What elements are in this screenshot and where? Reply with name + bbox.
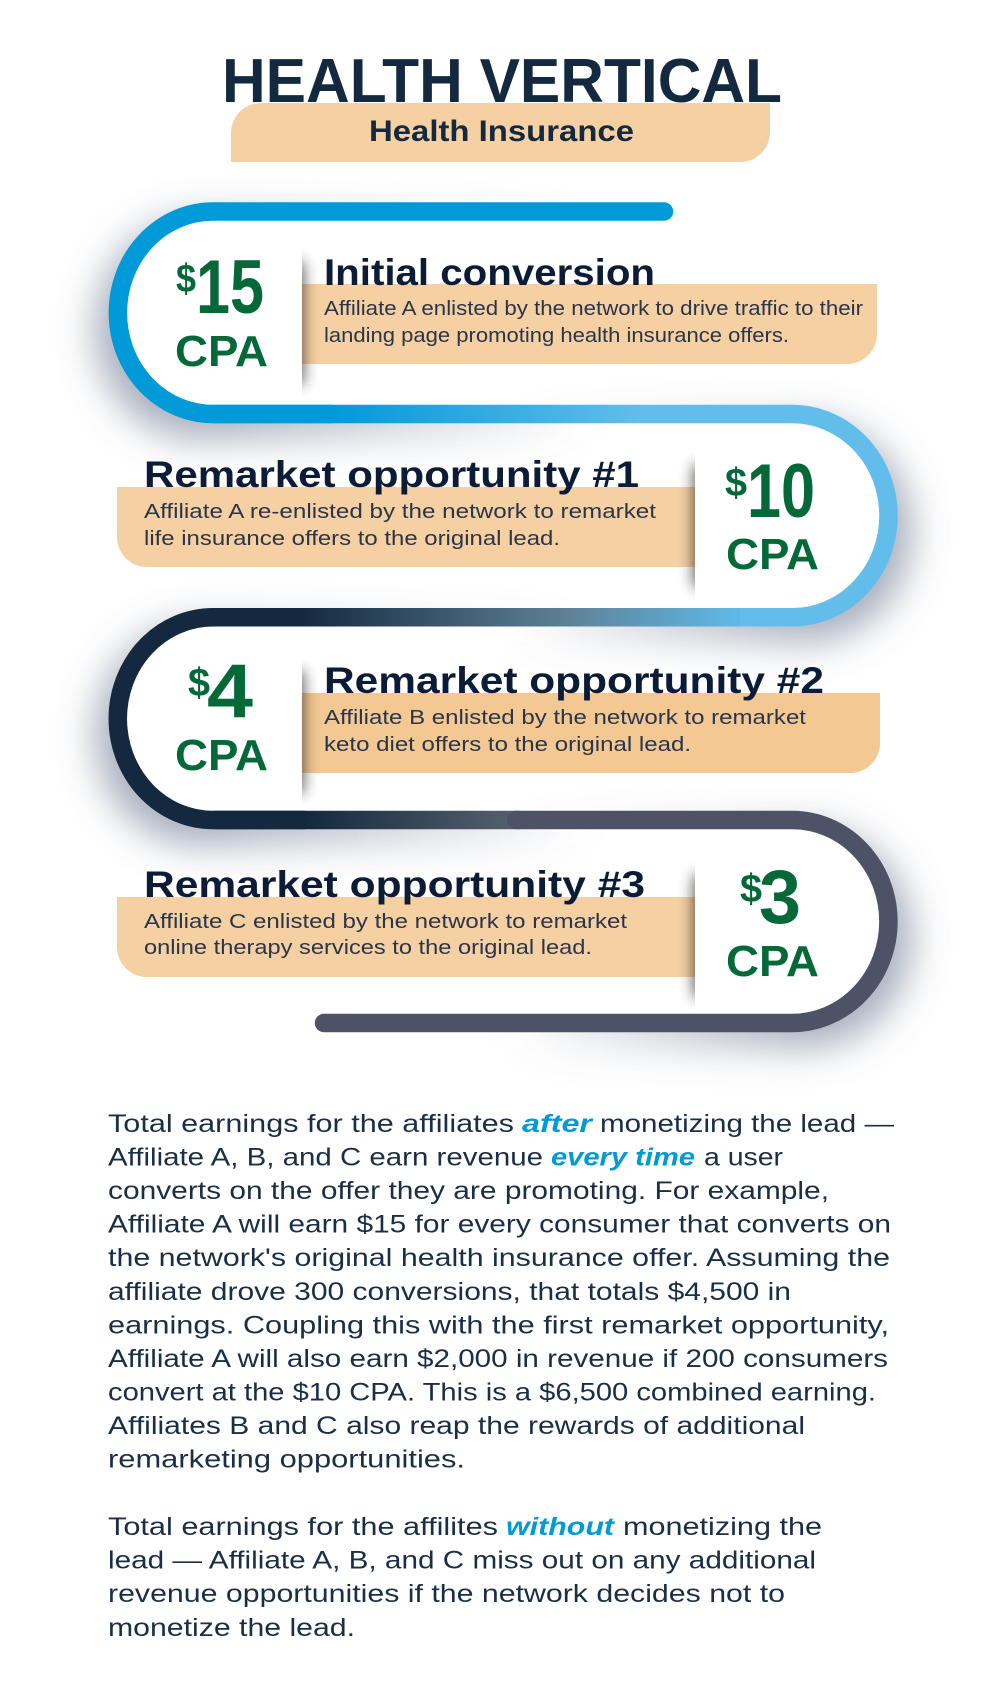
price: $15 CPA: 15 [196, 245, 264, 330]
panel: initial conversion [288, 252, 877, 384]
price: $10 CPA: $ [725, 461, 747, 505]
price: $3 CPA: 3 [759, 855, 801, 940]
panel: initial conversion: landing page promoting health insurance offers. [324, 324, 789, 347]
panel: initial conversion: Initial conversion [324, 252, 655, 293]
text block: earnings after monetizing: monetizing the lead — [600, 1110, 894, 1138]
text block: earnings after monetizing: a user [704, 1144, 783, 1172]
panel: remarket opportunity 3: Affiliate C enlisted by the network to remarket [144, 910, 627, 933]
price: $3 CPA: $ [740, 867, 762, 911]
price: $10 CPA: 10 [747, 449, 815, 534]
soft shadows behind the track [95, 218, 912, 1048]
panel: remarket opportunity 2: Remarket opportunity #2 [324, 660, 824, 701]
text block: earnings after monetizing: after [522, 1110, 594, 1138]
price: $3 CPA [726, 855, 819, 986]
panel: remarket opportunity 3: online therapy services to the original lead. [144, 936, 592, 959]
text block: earnings without monetizing: lead — Affiliate A, B, and C miss out on any additional [108, 1546, 816, 1574]
price: $4 CPA: CPA [175, 731, 268, 780]
text block: earnings after monetizing: Affiliates B and C also reap the rewards of additional [108, 1412, 805, 1440]
text block: earnings after monetizing: converts on the offer they are promoting. For example, [108, 1177, 829, 1205]
panel: remarket opportunity 2 [288, 660, 880, 793]
price: $10 CPA [725, 449, 819, 579]
text block: earnings after monetizing: affiliate drove 300 conversions, that totals $4,500 in [108, 1278, 791, 1306]
text block: earnings without monetizing: monetize the lead. [108, 1614, 355, 1642]
winding track [118, 212, 889, 1023]
panel: remarket opportunity 2: Affiliate B enlisted by the network to remarket [324, 706, 806, 729]
panel: remarket opportunity 1 [117, 454, 709, 587]
text block: earnings after monetizing: convert at the $10 CPA. This is a $6,500 combined earning. [108, 1378, 876, 1406]
title: HEALTH VERTICAL [222, 47, 782, 116]
panel: remarket opportunity 3 [117, 864, 709, 997]
text block: earnings after monetizing: the network's original health insurance offer. Assuming the [108, 1244, 890, 1272]
text block: earnings after monetizing: Affiliate A will also earn $2,000 in revenue if 200 consumers [108, 1345, 888, 1373]
panel: remarket opportunity 2: keto diet offers to the original lead. [324, 733, 691, 756]
price: $15 CPA: CPA [175, 327, 268, 376]
panel: remarket opportunity 3: Remarket opportunity #3 [144, 864, 645, 905]
panel: remarket opportunity 1: Affiliate A re-enlisted by the network to remarket [144, 500, 656, 523]
text block: earnings after monetizing: remarketing opportunities. [108, 1446, 465, 1474]
text block: earnings after monetizing: Total earnings for the affiliates [108, 1110, 514, 1138]
text block: earnings without monetizing: Total earnings for the affilites [108, 1513, 498, 1541]
price: $3 CPA: CPA [726, 937, 819, 986]
panel: initial conversion: Affiliate A enlisted by the network to drive traffic to their [324, 297, 863, 320]
subtitle banner: Health Insurance [369, 115, 634, 148]
text block: earnings after monetizing: Affiliate A will earn $15 for every consumer that converts on [108, 1210, 891, 1238]
panel: remarket opportunity 1: life insurance offers to the original lead. [144, 527, 560, 550]
text block: earnings after monetizing [108, 1110, 894, 1474]
text block: earnings after monetizing: every time [551, 1144, 695, 1172]
text block: earnings after monetizing: Affiliate A, B, and C earn revenue [108, 1144, 543, 1172]
text block: earnings after monetizing: earnings. Coupling this with the first remarket opportunity, [108, 1312, 889, 1340]
price: $15 CPA [175, 245, 268, 376]
price: $4 CPA: 4 [207, 649, 253, 734]
panel: remarket opportunity 1: Remarket opportunity #1 [144, 454, 639, 495]
text block: earnings without monetizing: monetizing the [623, 1513, 822, 1541]
price: $10 CPA: CPA [726, 530, 819, 579]
text block: earnings without monetizing: revenue opportunities if the network decides not to [108, 1580, 785, 1608]
price: $4 CPA: $ [188, 661, 210, 705]
text block: earnings without monetizing [108, 1513, 822, 1642]
price: $4 CPA [175, 649, 268, 780]
price: $15 CPA: $ [176, 257, 196, 301]
subtitle banner [231, 103, 770, 162]
text block: earnings without monetizing: without [506, 1513, 616, 1541]
